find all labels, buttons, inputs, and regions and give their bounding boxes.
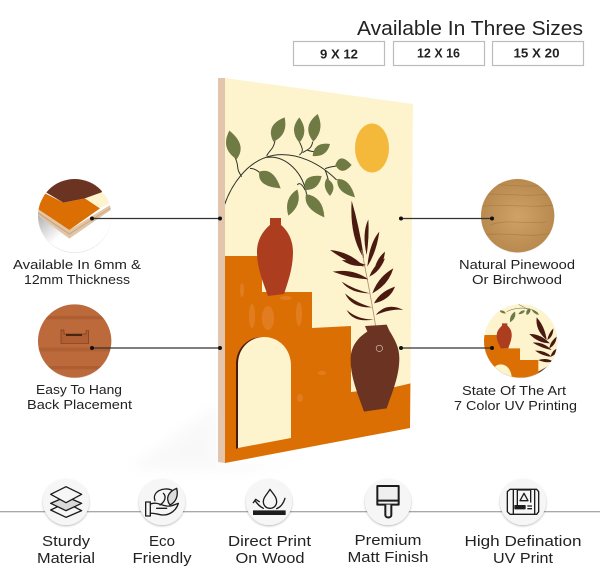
icon: printed canvas — [500, 479, 546, 525]
sun — [355, 124, 389, 172]
feature row baseline — [0, 511, 600, 513]
UV printing label: State Of The Art — [462, 383, 566, 398]
wooden board with artwork — [218, 70, 420, 470]
feature: high definition UV print — [464, 479, 582, 567]
label — [464, 533, 582, 567]
label: Material — [37, 550, 95, 567]
callout: UV printing — [399, 304, 577, 413]
pointer line — [399, 216, 494, 220]
feature: eco friendly — [132, 479, 192, 567]
fern and brown vase — [333, 250, 403, 412]
plant branch and leaves — [223, 114, 385, 273]
arch door shadow — [236, 337, 262, 449]
red vase — [257, 218, 293, 296]
thumbnail: wood texture — [480, 179, 554, 252]
callout: back placement — [27, 304, 222, 412]
thickness label: Available In 6mm & — [13, 257, 141, 272]
pointer line — [90, 216, 222, 220]
thumbnail: hanger on wood — [37, 304, 113, 378]
label — [228, 533, 312, 567]
wood type label: Natural Pinewood — [459, 257, 575, 272]
floor shadow under board — [130, 405, 300, 472]
size box: 9 x 12: 9 X 12 — [320, 46, 358, 62]
back placement label: Back Placement — [27, 397, 132, 412]
wood type label — [459, 257, 575, 287]
back placement label — [27, 382, 132, 412]
label: Matt Finish — [348, 549, 428, 566]
callout: wood type — [399, 179, 575, 287]
label: On Wood — [236, 550, 304, 567]
artwork — [220, 70, 420, 470]
label: Sturdy — [42, 533, 91, 550]
size box: 15 x 20 — [492, 42, 584, 66]
wood type label: Or Birchwood — [472, 272, 562, 287]
feature: sturdy material — [37, 479, 95, 567]
UV printing label — [454, 383, 577, 413]
feature: direct print — [228, 479, 312, 567]
thumbnail: artwork closeup — [484, 304, 558, 380]
label — [132, 533, 192, 567]
size box: 12 x 16 — [394, 42, 484, 66]
label: Premium — [354, 532, 422, 549]
thickness label — [13, 257, 141, 287]
label: High Defination — [464, 533, 582, 550]
thickness label: 12mm Thickness — [24, 272, 131, 287]
icon: layers — [43, 479, 89, 525]
icon: ink drop on wood — [246, 479, 292, 525]
orange steps — [225, 256, 412, 470]
pointer line — [90, 346, 222, 350]
heading: available sizes: Available In Three Sizes — [357, 18, 583, 40]
back placement label: Easy To Hang — [36, 382, 122, 397]
label: Eco — [149, 533, 175, 550]
board edge — [218, 78, 225, 463]
pointer line — [399, 346, 494, 350]
size options — [294, 42, 584, 66]
label: Direct Print — [228, 533, 312, 550]
size box: 12 x 16: 12 X 16 — [417, 46, 460, 60]
label: UV Print — [493, 550, 554, 567]
orange texture — [240, 283, 326, 402]
feature: premium matt finish — [348, 479, 428, 566]
UV printing label: 7 Color UV Printing — [454, 398, 577, 413]
icon: hand holding globe — [139, 479, 185, 525]
arch door face — [238, 337, 291, 448]
label — [348, 532, 428, 566]
size box: 9 x 12 — [294, 42, 384, 66]
label — [37, 533, 95, 567]
icon: paint brush — [365, 479, 411, 525]
label: Friendly — [132, 550, 192, 567]
size box: 15 x 20: 15 X 20 — [514, 46, 560, 60]
thumbnail: board corner — [35, 177, 112, 252]
callout: thickness — [13, 177, 222, 287]
